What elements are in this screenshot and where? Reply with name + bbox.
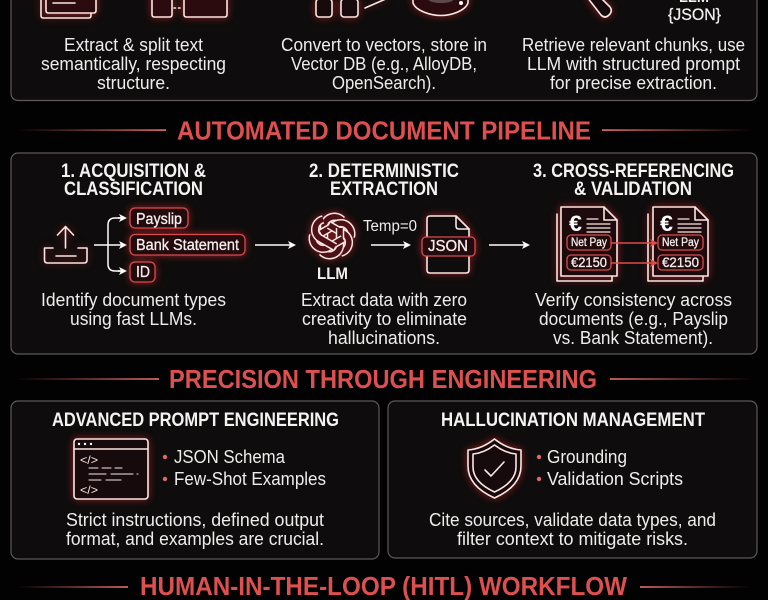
text: hallucination description [429,509,716,549]
icon: source document: € [569,211,582,236]
text: step 2 description: hallucinations. [328,327,440,348]
icon: code window [74,439,148,499]
text: prompt description [66,509,324,549]
step 3 title: & VALIDATION [574,178,692,200]
arrow: step 2 to 3 [489,244,528,246]
step 2 title [309,160,459,200]
chip: Bank Statement: Bank Statement [136,237,240,254]
bullets [163,446,326,489]
panel background [11,401,379,559]
panel: advanced prompt engineering [11,401,379,559]
icon: source document [557,207,617,281]
text: chunking description: Extract & split text [64,34,203,55]
text: step 3 description: vs. Bank Statement). [553,327,713,348]
label: Temp=0: Temp=0 [363,218,417,235]
text: retrieval description: LLM with structured prompt [527,53,740,74]
icon: text chunks [152,0,227,17]
text: hallucination description: filter context to mitigate risks. [457,528,688,549]
panel: hallucination management [388,401,757,558]
text: embedding description [281,34,487,93]
text: chunking description: structure. [97,72,170,93]
text: retrieval description: for precise extraction. [550,72,717,93]
arrows: cross-reference links [611,243,656,263]
chip: Payslip: Payslip [136,211,182,228]
text: step 2 description: Extract data with zero [301,289,467,310]
step 2 title: EXTRACTION [330,178,438,200]
step 2 title: 2. DETERMINISTIC [309,160,459,182]
icon: comparison document: Net Pay [662,237,699,249]
text: step 2 description [301,289,467,348]
icon: upload tray [44,226,87,263]
panel background [11,153,757,354]
heading: automated document pipeline: AUTOMATED DOCUMENT PIPELINE [177,116,591,146]
icon: LLM knot [310,217,354,255]
text: step 1 description [41,289,226,329]
step 1 title: CLASSIFICATION [64,178,203,200]
text: prompt description: format, and examples are crucial. [66,528,324,549]
arrow: step 1 to 2 [255,244,294,246]
step 3 title: 3. CROSS-REFERENCING [533,160,734,182]
chip: ID: ID [136,264,150,281]
arrows: classification branches [94,218,125,271]
label: LLM: LLM [317,265,348,283]
panel title: ADVANCED PROMPT ENGINEERING [52,409,339,431]
icon: document stack [41,0,96,18]
icon: comparison document: € [660,211,673,236]
icon: code window: </> [80,453,98,467]
text: embedding description: Convert to vectors, store in [281,34,487,55]
icon: comparison document [648,207,708,281]
panel title: HALLUCINATION MANAGEMENT [441,409,705,431]
icon: source document: €2150 [571,254,607,270]
icon: shield check [468,439,521,498]
step 1 title [61,160,206,200]
text: chunking description: semantically, respecting [41,53,226,74]
text: embedding description: OpenSearch). [332,72,436,93]
panel background [11,0,757,100]
text: step 3 description: documents (e.g., Payslip [539,308,728,329]
text: step 3 description [535,289,732,348]
bullets: Validation Scripts [547,468,683,489]
icon: vectors to database [316,0,468,17]
icon: magnifier handle [587,0,611,17]
text: step 1 description: using fast LLMs. [70,308,197,329]
heading: precision through engineering: PRECISION THROUGH ENGINEERING [169,364,597,394]
icon: source document: Net Pay [571,237,607,249]
text: step 1 description: Identify document types [41,289,226,310]
icon: JSON document: JSON [428,238,468,255]
panel: automated document pipeline [11,153,757,354]
text: retrieval description [522,34,745,93]
text: step 2 description: creativity to eliminate [302,308,467,329]
text: prompt description: Strict instructions, defined output [66,509,324,530]
arrow: LLM to JSON [371,244,409,246]
text: LLM JSON label: {JSON} [668,5,721,24]
text: chunking description [41,34,226,93]
text: step 3 description: Verify consistency across [535,289,732,310]
icon: comparison document: €2150 [662,254,699,270]
icon: code window: </> [80,483,98,497]
panel background [388,401,757,558]
text: embedding description: Vector DB (e.g., AlloyDB, [291,53,477,74]
panel: RAG steps (top) [11,0,757,100]
chip: ID [130,262,155,282]
text: retrieval description: Retrieve relevant chunks, use [522,34,745,55]
bullets: Few-Shot Examples [174,468,326,489]
bullets: JSON Schema [174,446,286,467]
step 3 title [533,160,734,200]
bullets: Grounding [547,446,627,467]
icon: JSON document [422,216,475,273]
step 1 title: 1. ACQUISITION & [61,160,206,182]
bullets [537,446,683,489]
text: hallucination description: Cite sources, validate data types, and [429,509,716,530]
